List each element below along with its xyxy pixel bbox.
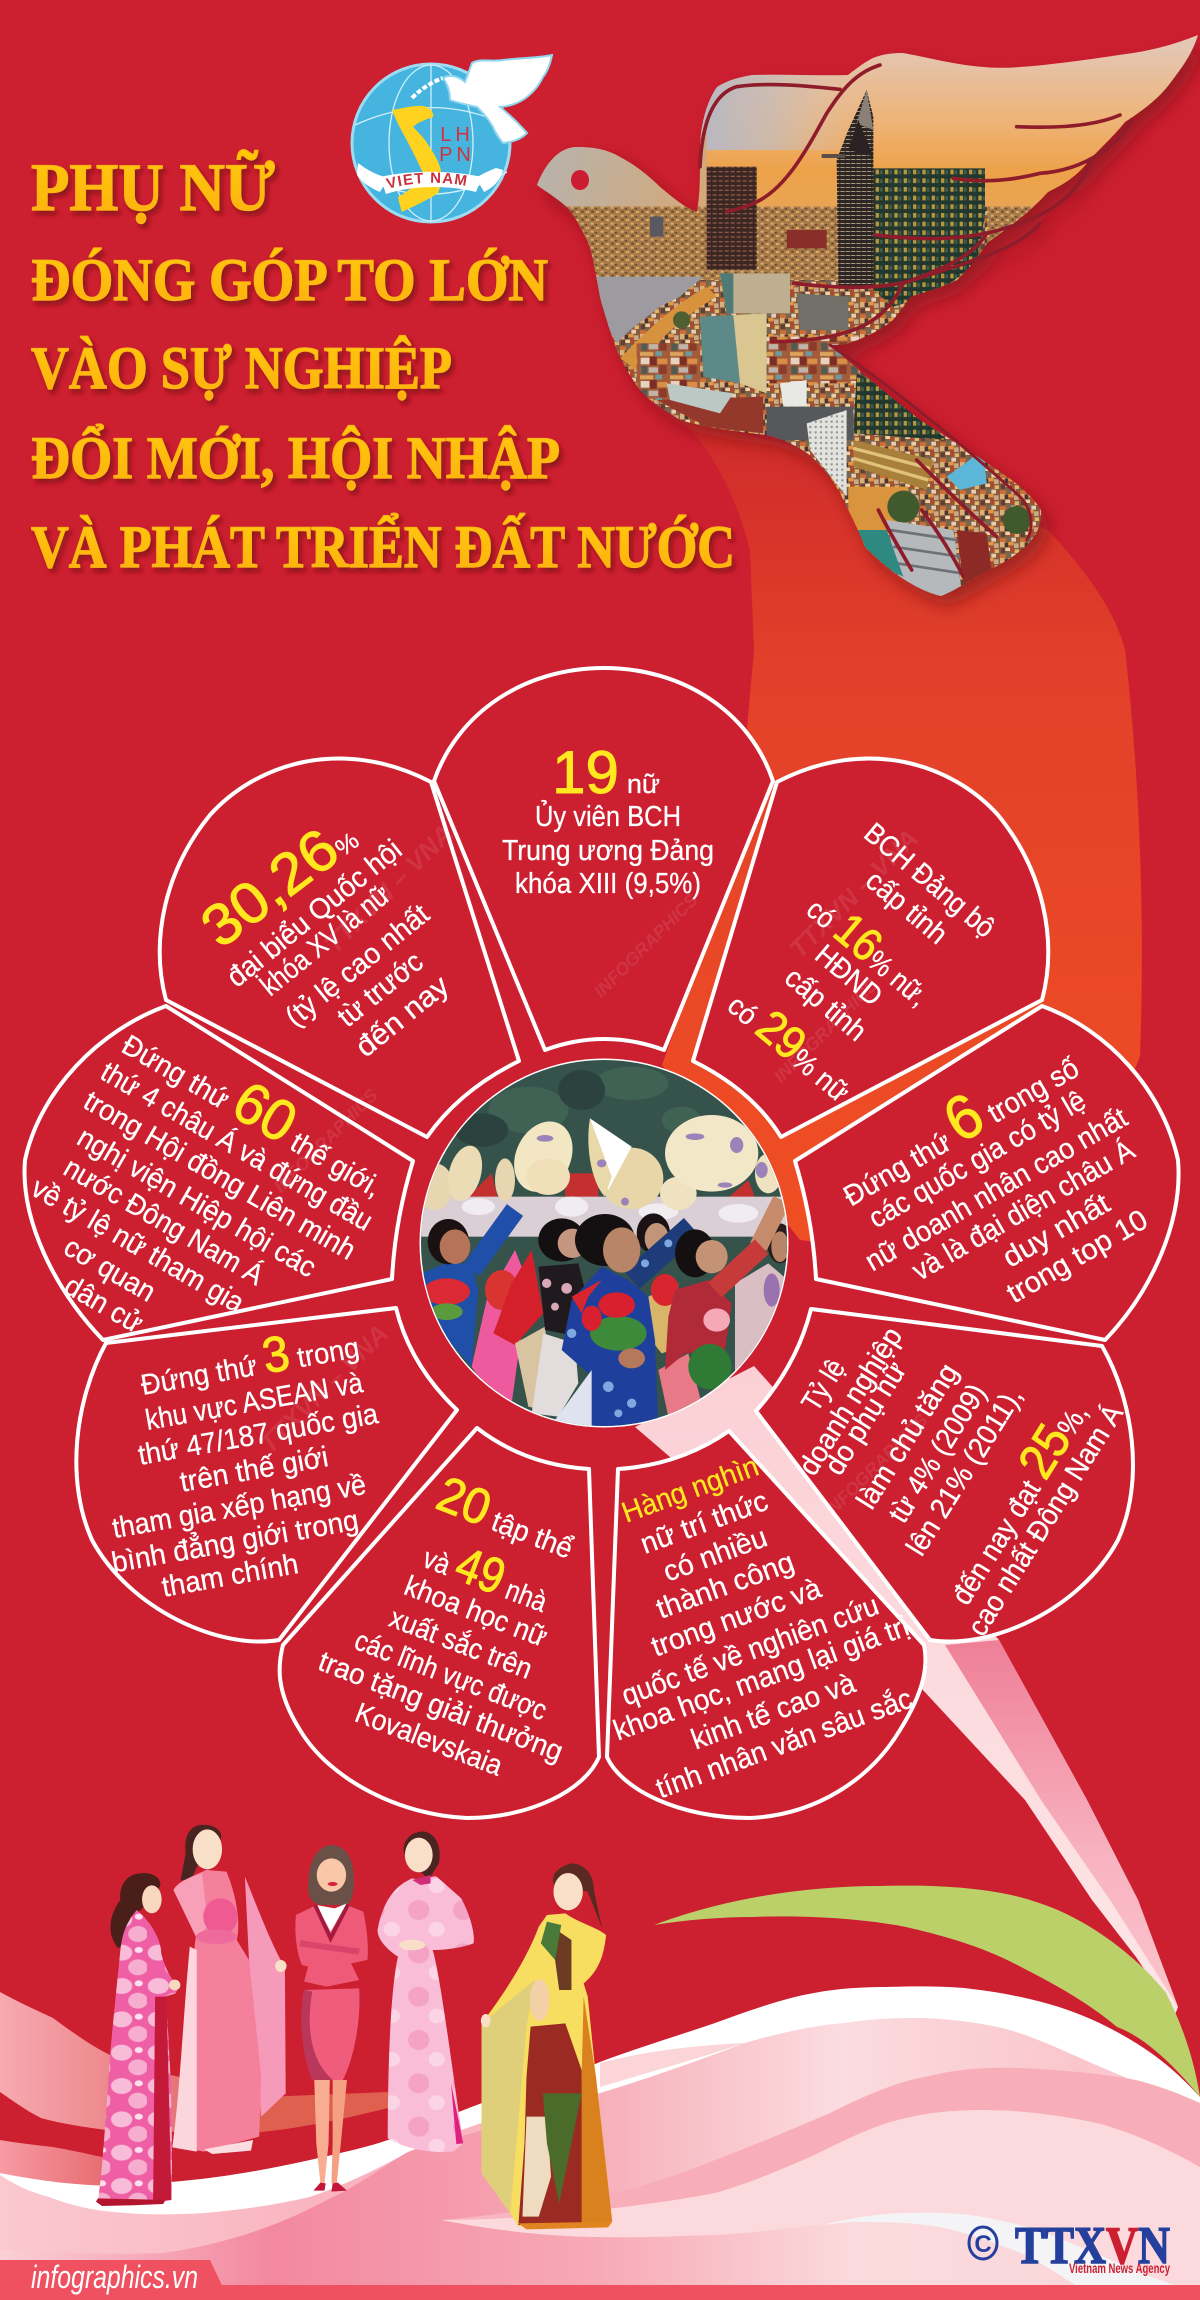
woman in red right with bouquet bbox=[658, 1229, 762, 1417]
stat: women-owned enterprises 25%: từ 4% (2009) bbox=[883, 1378, 993, 1529]
city sky bbox=[520, 30, 1200, 237]
footer tag with site name: infographics.vn bbox=[31, 2259, 198, 2295]
dove filled with city photo bbox=[520, 30, 1200, 607]
icon: white dove bbox=[443, 55, 552, 143]
stat: ranked 6th: trong top 10 bbox=[1002, 1204, 1153, 1310]
hazy skyline bbox=[563, 207, 863, 280]
stat: women-owned enterprises 25%: lên 21% (2011), bbox=[900, 1382, 1029, 1561]
stat: ranked 60th: nghị viện Hiệp hội các bbox=[72, 1122, 321, 1284]
stat: women-owned enterprises 25%: cao nhất Đông Nam Á bbox=[961, 1398, 1130, 1642]
stat: ranked 60th: nước Đông Nam Á bbox=[58, 1151, 270, 1292]
title: VÀO SỰ NGHIỆP bbox=[31, 335, 452, 401]
title: ĐÓNG GÓP TO LỚN bbox=[31, 247, 548, 313]
red backdrop and crowd bbox=[415, 1173, 795, 1237]
figure: woman in rose ao dai bbox=[172, 1825, 287, 2154]
stat: women-owned enterprises 25%: Tỷ lệ bbox=[796, 1354, 852, 1417]
stat: ranked 60th: dân cử bbox=[59, 1270, 148, 1340]
pink dress and red flag bbox=[472, 1250, 546, 1408]
stat: thousands of women intellectuals: Hàng nghìn bbox=[618, 1450, 763, 1529]
stat: ranked 3rd in ASEAN: thứ 47/187 quốc gia bbox=[136, 1398, 381, 1472]
stat: ranked 3rd in ASEAN: Đứng thứ 3 trong bbox=[135, 1312, 362, 1406]
stat: Kovalevskaia award: 20 tập thể bbox=[430, 1465, 584, 1569]
stat: thousands of women intellectuals: có nhiều bbox=[659, 1521, 772, 1588]
watermarks: TTXVN – VNA bbox=[783, 823, 924, 964]
stat: party committees 16% and 29%: cấp tỉnh bbox=[778, 962, 872, 1048]
title: ĐỔI MỚI, HỘI NHẬP bbox=[31, 425, 560, 491]
women figures bbox=[96, 1825, 612, 2229]
stat: Kovalevskaia award: và 49 nhà bbox=[417, 1524, 559, 1623]
footer bar bbox=[0, 2285, 1200, 2300]
stat: Kovalevskaia award bbox=[314, 1465, 584, 1783]
stat: ranked 60th: Đứng thứ 60 thế giới, bbox=[113, 1006, 400, 1209]
stat: 30,26% bbox=[189, 802, 456, 1064]
icon: Vietnam map bbox=[392, 106, 441, 212]
green leaf bbox=[654, 1886, 1200, 2097]
stat: party committees 16% and 29%: HĐND bbox=[809, 939, 888, 1013]
stat: party committees 16% and 29%: có 29% nữ bbox=[719, 976, 866, 1111]
bottom waves bbox=[0, 1986, 1200, 2300]
stat: ranked 6th: các quốc gia có tỷ lệ bbox=[863, 1085, 1092, 1235]
watermarks: TTXVN – VNA bbox=[253, 1318, 394, 1459]
stat: party committees 16% and 29%: BCH Đảng bộ bbox=[858, 817, 1001, 944]
river bbox=[587, 277, 703, 343]
watermarks: INFOGRAPHICS bbox=[270, 1085, 382, 1197]
stat: ranked 3rd in ASEAN: bình đẳng giới trong bbox=[109, 1503, 361, 1579]
conical hats bbox=[417, 1112, 782, 1210]
stat: women-owned enterprises 25%: doanh nghiệp bbox=[793, 1322, 909, 1481]
central woman in blue bbox=[555, 1214, 692, 1430]
stat: 19 women: 19 nữ bbox=[552, 739, 660, 806]
stat: 30,26%: đại biểu Quốc hội bbox=[221, 834, 408, 994]
stat: thousands of women intellectuals: tính nhân văn sâu sắc bbox=[652, 1682, 917, 1805]
orange ribbon from dove bbox=[662, 420, 1142, 1243]
stat: women-owned enterprises 25%: làm chủ tăng bbox=[851, 1358, 965, 1515]
feather lines bbox=[700, 65, 1132, 577]
stat: ranked 6th: Đứng thứ 6 trong số bbox=[823, 1026, 1088, 1219]
text: LHPN bbox=[439, 124, 475, 166]
flower petals with statistics bbox=[25, 668, 1179, 1818]
title: PHỤ NỮ bbox=[31, 149, 275, 225]
stat: ranked 3rd in ASEAN: tham chính bbox=[159, 1548, 301, 1604]
stat: thousands of women intellectuals: khoa học, mang lại giá trị bbox=[609, 1611, 913, 1747]
ribbon: VIET NAM bbox=[357, 163, 503, 194]
stat: party committees 16% and 29%: cấp tỉnh bbox=[859, 865, 953, 951]
stat: thousands of women intellectuals: thành công bbox=[652, 1546, 798, 1626]
watermarks: INFOGRAPHICS bbox=[820, 1410, 932, 1522]
stat: thousands of women intellectuals: kinh tế cao và bbox=[687, 1667, 860, 1756]
dove eye bbox=[571, 170, 589, 190]
stat: Kovalevskaia award: xuất sắc trên bbox=[385, 1601, 537, 1686]
stat: ranked 60th: cơ quan bbox=[58, 1231, 161, 1309]
stat: ranked 6th: duy nhất bbox=[997, 1188, 1116, 1274]
figure: woman in yellow painted ao dai bbox=[481, 1863, 612, 2229]
stat: ranked 60th: thứ 4 châu Á và đứng đầu bbox=[95, 1055, 378, 1238]
stat: thousands of women intellectuals: trong nước và bbox=[647, 1572, 826, 1663]
stat: 19 women: Ủy viên BCH bbox=[535, 799, 681, 833]
text: LHPN: LH bbox=[440, 124, 474, 146]
stat: Kovalevskaia award: Kovalevskaia bbox=[351, 1697, 507, 1783]
stat: women-owned enterprises 25%: đến nay đạt 25%, bbox=[929, 1388, 1098, 1613]
stat: 19 women: khóa XIII (9,5%) bbox=[515, 868, 701, 900]
stat: ranked 3rd in ASEAN: tham gia xếp hạng về bbox=[110, 1469, 368, 1545]
stat: 30,26%: (tỷ lệ cao nhất bbox=[280, 898, 436, 1033]
stat: thousands of women intellectuals: quốc tế về nghiên cứu bbox=[618, 1590, 883, 1712]
woman in black floral dress bbox=[532, 1218, 588, 1417]
pink ribbon from flower bbox=[635, 1366, 1178, 2015]
figure: woman in pink business suit bbox=[295, 1845, 368, 2192]
watermarks: TTXVN – VNA bbox=[318, 818, 459, 959]
stat: ranked 3rd in ASEAN bbox=[109, 1312, 381, 1604]
stat: Kovalevskaia award: trao tặng giải thưởng bbox=[314, 1646, 567, 1768]
logo: Women's Union bbox=[350, 54, 554, 224]
title bbox=[31, 149, 735, 580]
stat: party committees 16% and 29% bbox=[719, 817, 1001, 1111]
stat: ranked 6th: nữ doanh nhân cao nhất bbox=[860, 1102, 1133, 1278]
woman behind center bbox=[637, 1213, 679, 1353]
stat: thousands of women intellectuals: nữ trí thức bbox=[636, 1485, 772, 1561]
figure: woman in light pink ao dai bbox=[378, 1832, 474, 2152]
stat: ranked 3rd in ASEAN: trên thế giới bbox=[178, 1441, 331, 1499]
stat: 19 women bbox=[502, 739, 714, 900]
title: VÀ PHÁT TRIỂN ĐẤT NƯỚC bbox=[31, 514, 735, 580]
stat: 19 women: Trung ương Đảng bbox=[502, 835, 714, 867]
stat: 30,26%: đến nay bbox=[350, 969, 456, 1064]
watermarks: INFOGRAPHICS bbox=[770, 975, 882, 1087]
stat: ranked 60th bbox=[26, 1006, 400, 1340]
foreground buildings bbox=[637, 273, 1031, 603]
watermarks: INFOGRAPHICS bbox=[590, 890, 702, 1002]
stat: Kovalevskaia award: khoa học nữ bbox=[400, 1570, 551, 1654]
watermarks bbox=[253, 818, 932, 1522]
stat: 30,26%: khóa XV là nữ bbox=[255, 879, 397, 1003]
stat: 30,26%: 30,26% bbox=[189, 802, 369, 960]
stat: party committees 16% and 29%: có 16% nữ, bbox=[798, 880, 945, 1015]
center photo: women with conical hats bbox=[415, 1050, 795, 1430]
stat: 30,26%: từ trước bbox=[332, 946, 430, 1034]
stat: Kovalevskaia award: các lĩnh vực được bbox=[350, 1625, 551, 1727]
stat: ranked 6th bbox=[823, 1026, 1153, 1310]
glass towers bbox=[707, 90, 985, 307]
icon: olive branch bbox=[412, 78, 443, 98]
stat: thousands of women intellectuals bbox=[609, 1450, 917, 1805]
ribbon: VIET NAM: VIET NAM bbox=[386, 172, 467, 188]
woman in blue left with flowers bbox=[422, 1210, 515, 1367]
stat: women-owned enterprises 25% bbox=[793, 1322, 1130, 1642]
figure: woman in floral pink ao dai bbox=[96, 1873, 180, 2206]
stat: ranked 6th: và là đại diện châu Á bbox=[906, 1133, 1141, 1287]
copyright TTXVN logo: TTXVN bbox=[1015, 2217, 1170, 2275]
copyright TTXVN logo: C bbox=[974, 2231, 992, 2258]
woman far right bbox=[735, 1196, 787, 1370]
stat: women-owned enterprises 25%: do phụ nữ bbox=[819, 1356, 913, 1481]
stat: ranked 3rd in ASEAN: khu vực ASEAN và bbox=[143, 1367, 366, 1437]
stat: ranked 60th: về tỷ lệ nữ tham gia bbox=[26, 1172, 250, 1320]
text: LHPN: PN bbox=[439, 144, 475, 166]
stat: ranked 60th: trong Hội đồng Liên minh bbox=[78, 1085, 361, 1267]
